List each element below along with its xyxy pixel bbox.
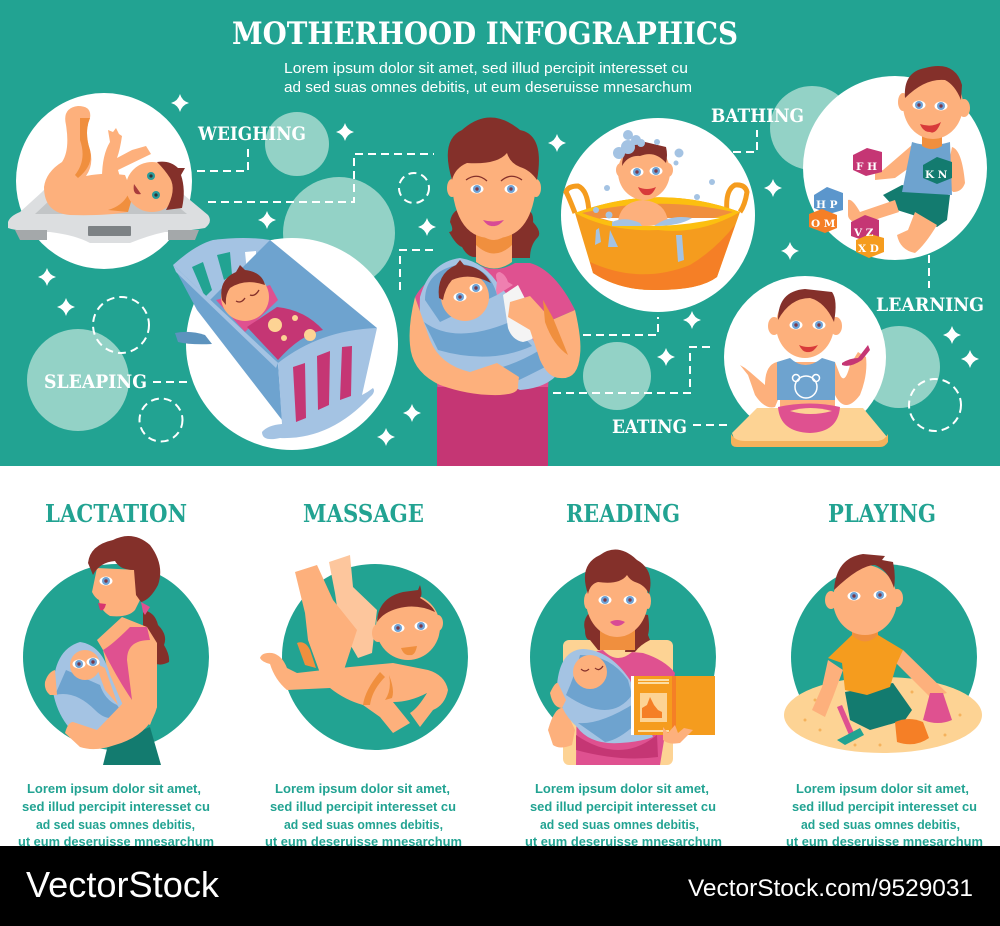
caption: ut eum deseruisse mnesarchum [18,834,214,849]
panel: massage [260,499,468,849]
panel: lactation [18,499,214,849]
caption [18,781,214,849]
caption: ut eum deseruisse mnesarchum [525,834,722,849]
intro text: Lorem ipsum dolor sit amet, sed illud percipit interesset cu [284,60,688,77]
label: eating: EATING [612,416,687,438]
dashed connectors [93,130,961,442]
illustration: baby bathing [561,118,755,312]
panel: reading [525,499,722,849]
panel circle and baby [260,555,468,750]
heading: lactation: LACTATION [45,499,187,528]
teal header background [0,0,1000,466]
illustration: baby with blocks [803,66,987,260]
caption: Lorem ipsum dolor sit amet, [27,781,201,796]
caption: sed illud percipit interesset cu [22,799,210,814]
caption [265,781,462,849]
intro text: ad sed suas omnes debitis, ut eum deseruisse mnesarchum [284,79,692,96]
caption: sed illud percipit interesset cu [270,799,456,814]
alphabet blocks [809,148,952,258]
alphabet blocks: K N [925,169,948,181]
label: bathing: BATHING [711,105,804,127]
caption: ad sed suas omnes debitis, [284,817,443,832]
alphabet blocks: H P [816,199,838,211]
panel: playing [784,499,983,849]
alphabet blocks: F H [856,161,877,173]
heading: reading: READING [566,499,680,528]
caption: Lorem ipsum dolor sit amet, [535,781,709,796]
illustration: mother feeding baby [410,118,580,466]
illustration: baby eating [724,276,888,447]
caption: ad sed suas omnes debitis, [36,817,195,832]
panel circle, mother and book [530,550,716,765]
sparkle stars [38,94,979,446]
alphabet blocks: V Z [853,227,874,239]
caption: ad sed suas omnes debitis, [540,817,699,832]
decorative pale circles [27,86,940,431]
heading: massage: MASSAGE [303,499,424,528]
watermark footer bar: VectorStock [26,864,220,905]
title: MOTHERHOOD INFOGRAPHICS [232,16,738,52]
illustration: baby on scale [8,93,210,269]
illustration: baby in crib [173,238,398,450]
caption: Lorem ipsum dolor sit amet, [796,781,969,796]
alphabet blocks: O M [811,218,836,230]
heading: playing: PLAYING [828,499,936,528]
caption: ut eum deseruisse mnesarchum [265,834,462,849]
panel circle and mother [23,536,209,765]
caption [786,781,983,849]
watermark footer bar [0,846,1000,926]
caption: sed illud percipit interesset cu [792,799,977,814]
watermark footer bar: VectorStock.com/9529031 [688,875,973,902]
panel circle and boy in sandbox [784,554,982,753]
intro text [284,60,692,96]
caption: ad sed suas omnes debitis, [801,817,960,832]
label: learning: LEARNING [876,294,984,316]
alphabet blocks: X D [858,243,879,255]
caption: ut eum deseruisse mnesarchum [786,834,983,849]
caption [525,781,722,849]
caption: sed illud percipit interesset cu [530,799,716,814]
label: weighing: WEIGHING [197,123,306,145]
label: sleaping: SLEAPING [44,371,147,393]
caption: Lorem ipsum dolor sit amet, [275,781,450,796]
